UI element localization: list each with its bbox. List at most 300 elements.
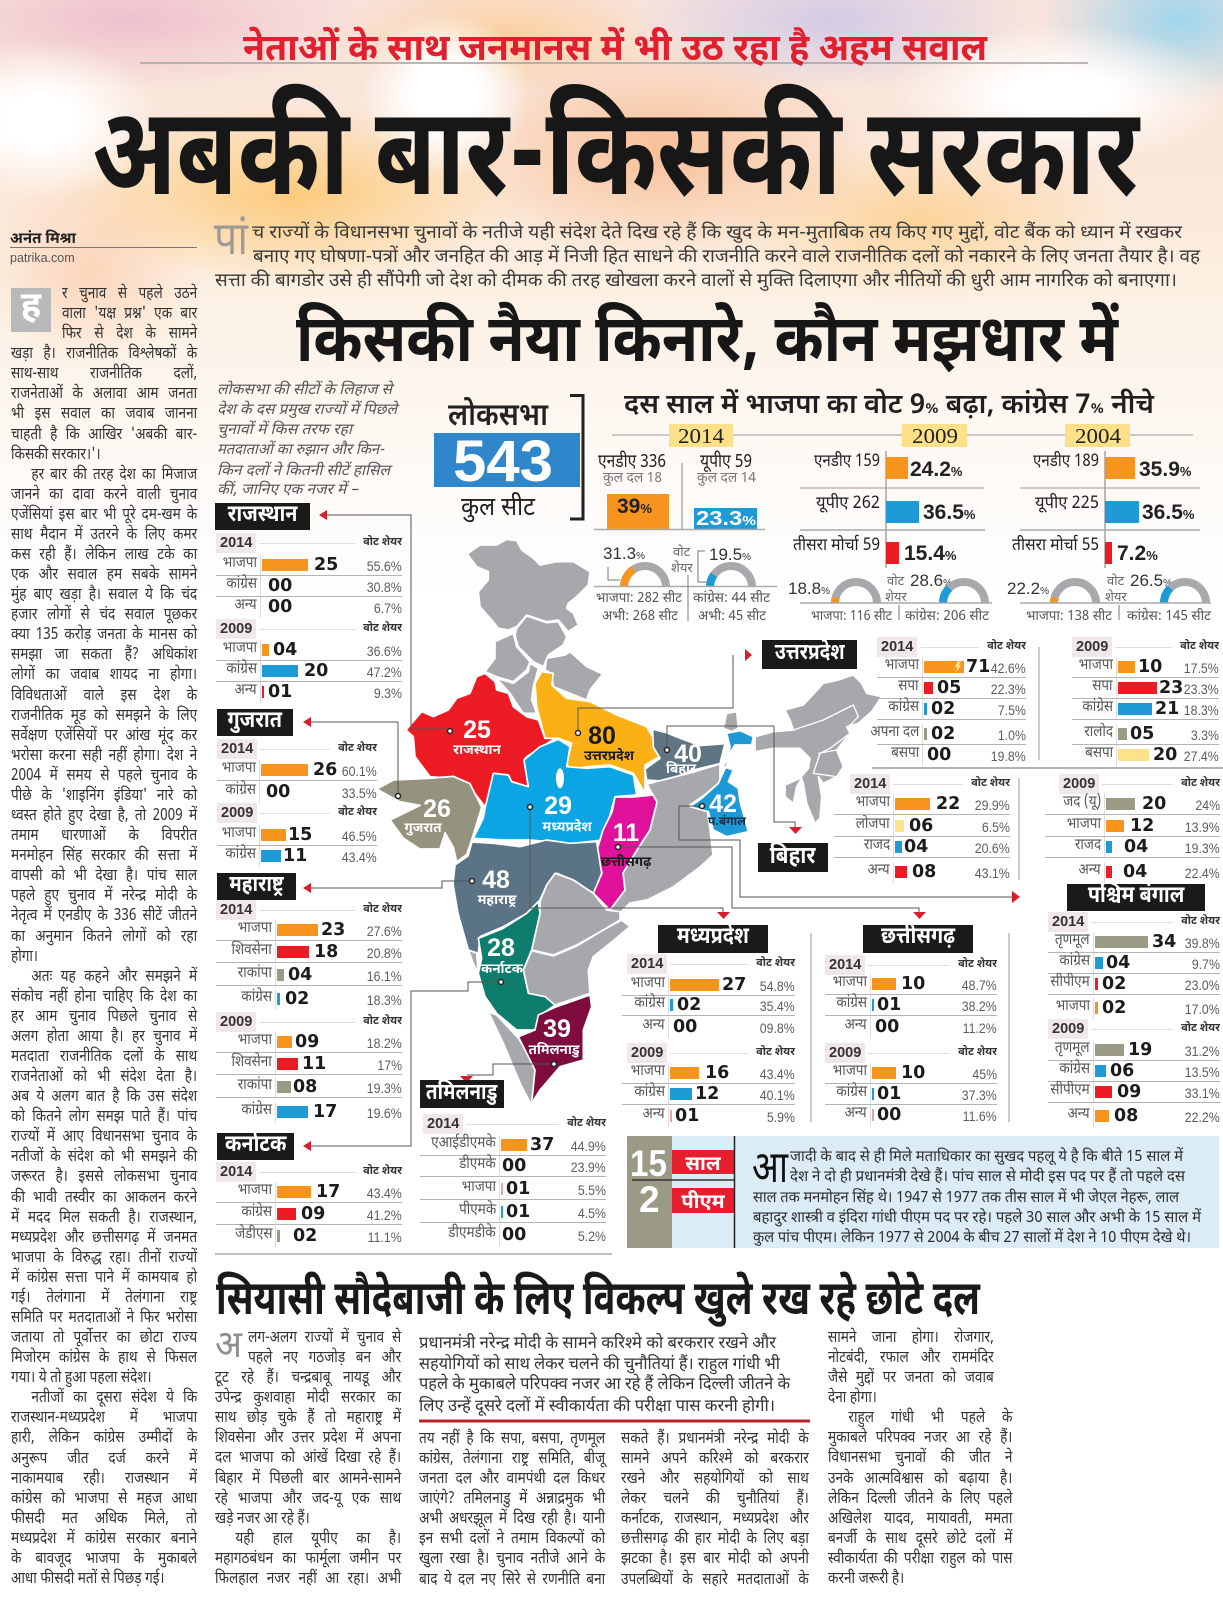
state table: Maharashtra: राकांपा [238, 964, 272, 984]
map: Uttar Pradesh [535, 672, 659, 793]
map: Andhra Pradesh [523, 920, 630, 1005]
map seat labels: उत्तरप्रदेश [584, 746, 635, 766]
state table: Bihar 2009: 04 [1123, 862, 1147, 882]
state table: Gujarat: 43.4% [342, 848, 377, 864]
state table: Uttar Pradesh 2009: 23 [1159, 678, 1183, 698]
state table: Bihar 2009 [1045, 774, 1220, 883]
byline [10, 230, 197, 265]
state table: Madhya Pradesh: 27 [722, 974, 746, 994]
state table: Karnataka: 11.1% [368, 1228, 402, 1244]
left column article: मनमोहन सिंह सरकार की सत्ता में [11, 846, 197, 867]
map seat labels: 26 [423, 795, 451, 823]
state table: Chhattisgarh: वोट शेयर [958, 1046, 997, 1060]
bottom article column 3: छत्तीसगढ़ की हार मोदी के लिए बड़ा [621, 1529, 809, 1550]
left column article: पीछे के 'शाइनिंग इंडिया' नारे को [11, 786, 197, 807]
state table: West Bengal: कांग्रेस [1059, 1060, 1090, 1080]
2009 alliance bars: तीसरा मोर्चा 59 [793, 534, 880, 557]
state table: Rajasthan: 55.6% [367, 558, 402, 574]
2009 seat gauges: भाजपा: 116 सीट [811, 607, 892, 626]
bottom article column 4: विधानसभा चुनावों की जीत ने [828, 1448, 1012, 1469]
kicker headline: नेताओं के साथ जनमानस में भी उठ रहा है अहम सवाल [243, 26, 988, 76]
state table: Maharashtra: 11 [302, 1054, 326, 1074]
state table: Bihar 2014: 20.6% [975, 840, 1010, 856]
left column article: संकोच नहीं होना चाहिए कि देश का [11, 987, 197, 1008]
bottom article column 2: अभी अधरझूल में दिख रही है। यानी [419, 1509, 605, 1530]
state table: Gujarat: 46.5% [342, 828, 377, 844]
state table: Chhattisgarh: 00 [877, 1104, 901, 1124]
state table: West Bengal: 08 [1114, 1106, 1138, 1126]
state table: Rajasthan: 2014 [220, 535, 252, 551]
drop cap box H [11, 288, 51, 332]
state table: Bihar 2009: 19.3% [1185, 840, 1220, 856]
15 years 2 PMs callout: साल तक मनमोहन सिंह थे। 1947 से 1977 तक तीस साल में भी जेएल नेहरू, लाल [753, 1187, 1179, 1209]
left column article: आधा फीसदी मतों से पिछड़ गई। [11, 1569, 165, 1590]
state table: Maharashtra: 2009 [220, 1014, 252, 1030]
map seat labels: 11 [613, 819, 639, 847]
state table: Chhattisgarh: वोट शेयर [958, 958, 997, 972]
state table: Tamil Nadu: 37 [530, 1134, 554, 1154]
state table: Bihar 2014: अन्य [868, 862, 890, 880]
bottom article column 2: इन सभी दलों ने तमाम विकल्पों को [419, 1529, 605, 1550]
state table: Gujarat: 11 [283, 846, 307, 866]
state heading: Gujarat [217, 709, 293, 736]
state table: West Bengal [1048, 912, 1220, 1127]
state table: Tamil Nadu [420, 1114, 606, 1246]
state table: Gujarat: कांग्रेस [225, 782, 256, 800]
bottom article column 3 [621, 1428, 810, 1591]
2014 seat gauges: शेयर [671, 560, 693, 578]
map: Jharkhand and Odisha [610, 764, 720, 913]
state heading: Uttar Pradesh [762, 640, 857, 669]
state table: Gujarat: वोट शेयर [338, 806, 377, 820]
left column article: जानने का दावा करने वाली चुनाव [11, 485, 197, 506]
left column article: राजस्थान-मध्यप्रदेश में भाजपा [11, 1408, 197, 1429]
left column article: लोगों का जवाब शायद ना होगा। [11, 665, 197, 686]
state table: Bihar 2009: जद (यू) [1063, 794, 1101, 812]
vote share heading: दस साल में भाजपा का वोट 9 % बढ़ा, कांग्रेस 7% नीचे [624, 388, 1155, 425]
state heading: Rajasthan: राजस्थान [228, 501, 297, 531]
bottom article column 4: उनके आत्मविश्वास को बढ़ाया है। [828, 1469, 1012, 1490]
state table: Gujarat [217, 739, 378, 867]
map: Haryana [497, 663, 538, 713]
state table: Maharashtra: 09 [295, 1032, 319, 1052]
left column article: भरोसा करना सही नहीं होगा। देश ने [11, 746, 197, 767]
state table: West Bengal: 31.2% [1185, 1042, 1220, 1058]
left column article: भी इस सवाल का जवाब जानना [11, 404, 197, 425]
state table: Rajasthan [216, 533, 402, 703]
left column article: मतदाता राजनीतिक दलों के साथ [11, 1047, 197, 1068]
state table: Tamil Nadu: 00 [502, 1156, 526, 1176]
map connectors and arrows [303, 510, 1020, 1151]
state table: Maharashtra: 16.1% [367, 968, 402, 984]
state table: Uttar Pradesh 2009: 23.3% [1184, 680, 1219, 696]
map seat labels: 25 [463, 716, 491, 744]
left column article: अतः यह कहने और समझने में [31, 967, 197, 988]
bottom article column 3: सामने अपने करिश्मे को बरकरार [621, 1449, 809, 1470]
2004 seat gauges: वोट [1107, 573, 1125, 591]
state table: Maharashtra: 17% [377, 1056, 402, 1072]
state table: Madhya Pradesh: 02 [677, 994, 701, 1014]
state table: Karnataka: वोट शेयर [363, 1165, 402, 1179]
15 years 2 PMs callout: साल [685, 1153, 722, 1179]
state table: Tamil Nadu: 2014 [427, 1116, 459, 1132]
state table: Madhya Pradesh: भाजपा [631, 1062, 665, 1082]
left column article: गई। तेलंगाना में तेलंगाना राष्ट्र [11, 1288, 197, 1309]
left column article: का अनुमान कितने लोगों को रहा [11, 926, 197, 948]
state table: Karnataka: 2014 [220, 1164, 252, 1180]
state table: Tamil Nadu: 44.9% [571, 1138, 606, 1154]
state table: Karnataka: 17 [316, 1182, 340, 1202]
left column article: समझा जा सकता हैं? अधिकांश [11, 645, 197, 666]
2009 seat gauges [788, 571, 992, 626]
left column article: में मदद मिल सकती है। राजस्थान, [11, 1208, 197, 1229]
2009 alliance bars: यूपीए 262 [816, 492, 880, 515]
map: Tamil Nadu [518, 995, 592, 1103]
2004 seat gauges: 26.5% [1130, 571, 1172, 590]
left column article: फिर से देश के सामने [62, 324, 197, 345]
state table: Chhattisgarh: 38.2% [962, 998, 997, 1014]
2014 alliance bars: यूपीए 59 [700, 451, 752, 475]
state table: Uttar Pradesh 2014: 00 [927, 744, 951, 764]
state table: Tamil Nadu: 01 [506, 1202, 530, 1222]
15 years 2 PMs callout: जादी के बाद से ही मिले मताधिकार का सुखद पहलू ये है कि बीते 15 साल में [790, 1146, 1184, 1168]
state table: Bihar 2014: 29.9% [975, 796, 1010, 812]
state table: Rajasthan: 20 [304, 660, 328, 680]
state table: Uttar Pradesh 2014: 02 [931, 724, 955, 744]
state heading: Uttar Pradesh: उत्तरप्रदेश [775, 639, 844, 668]
state heading: Madhya Pradesh [658, 925, 768, 953]
state table: Uttar Pradesh 2014: 71 [966, 656, 990, 676]
left column article: अलग होता आया है। हर चुनाव में [11, 1027, 197, 1048]
bottom article column 2 [419, 1428, 607, 1591]
2014 seat gauges: भाजपा: 282 सीट [596, 589, 682, 608]
state table: Gujarat: 26 [313, 760, 337, 780]
state table: Karnataka: 09 [301, 1204, 325, 1224]
bottom article column 2: खुला रखा है। चुनाव नतीजे आने के [419, 1549, 605, 1570]
map: Telangana [532, 873, 620, 955]
bottom headline: सियासी सौदेबाजी के लिए विकल्प खुले रख रहे छोटे दल [216, 1271, 981, 1334]
left column article: हारी, लेकिन कांग्रेस उम्मीदों के [11, 1428, 197, 1449]
state table: Madhya Pradesh: 2009 [631, 1045, 663, 1061]
2009 alliance bars: 15.4% [904, 542, 957, 565]
map seat labels: 48 [482, 866, 510, 894]
left column article: राजनेताओं को भी संदेश देता है। [11, 1067, 197, 1088]
left column article: मध्यप्रदेश में कांग्रेस सरकार बनाने [11, 1529, 197, 1550]
state table: Chhattisgarh: 00 [875, 1016, 899, 1036]
state table: Rajasthan: भाजपा [223, 554, 257, 574]
left column article: गया। ये तो हुआ पहला संदेश। [11, 1368, 152, 1389]
state table: Madhya Pradesh: 09.8% [760, 1020, 795, 1036]
map seat labels: मध्यप्रदेश [542, 817, 592, 837]
state table: Bihar 2009: अन्य [1079, 862, 1101, 880]
state heading: Maharashtra: महाराष्ट्र [229, 871, 284, 900]
state table: Rajasthan: अन्य [235, 682, 257, 700]
state table: Bihar 2014: 2014 [854, 776, 886, 792]
bottom article column 1: यही हाल यूपीए का है। [235, 1529, 401, 1550]
left column article: राज्यों में आए विधानसभा चुनाव के [11, 1127, 197, 1148]
state table: Tamil Nadu: 5.5% [578, 1182, 606, 1198]
state table: Madhya Pradesh: भाजपा [631, 974, 665, 994]
left column article: मध्यप्रदेश और छत्तीसगढ़ में जनमत [11, 1228, 197, 1249]
15 years 2 PMs callout: कुल पांच पीएम। लेकिन 1977 से 2004 के बीच 27 सालों में देश ने 10 पीएम देखे थे। [753, 1227, 1191, 1249]
dividers between state tables [215, 647, 1223, 1254]
state table: Uttar Pradesh 2009: बसपा [1085, 744, 1113, 764]
state table: Uttar Pradesh 2009: 18.3% [1184, 702, 1219, 718]
left column article: ध्वस्त होते हुए देखा है, तो 2009 में [11, 806, 197, 827]
bottom article column 1: बिहार में पिछली बार आमने-सामने [215, 1469, 401, 1490]
bottom article column 1: टूट रहे हैं। चन्द्रबाबू नायडू और [215, 1368, 401, 1389]
bottom article column 3: रखने और सहयोगियों को साथ [621, 1469, 809, 1490]
state table: Rajasthan: 47.2% [367, 664, 402, 680]
bottom article column 4: अखिलेश यादव, मायावती, ममता [828, 1509, 1012, 1530]
left column article: नतीजों के संदेश को भी समझने की [11, 1147, 197, 1168]
state table: Uttar Pradesh 2009: वोट शेयर [1180, 640, 1219, 654]
state table: Karnataka: भाजपा [238, 1182, 272, 1200]
state table: Bihar 2009: 24% [1195, 796, 1220, 812]
state table: Gujarat: वोट शेयर [338, 742, 377, 756]
state table: Chhattisgarh: 11.2% [963, 1020, 997, 1036]
state table: Maharashtra: 18.3% [367, 992, 402, 1008]
bottom article column 2: बाद ये दल नए सिरे से रणनीति बना [419, 1570, 605, 1591]
state heading: Bihar: बिहार [770, 841, 816, 873]
state table: Uttar Pradesh 2014: भाजपा [885, 656, 919, 676]
state table: Rajasthan: 25 [314, 554, 338, 574]
byline: patrika.com [10, 251, 75, 265]
state table: Bihar 2014: 06 [909, 816, 933, 836]
2004 seat gauges [1007, 571, 1211, 626]
state table: Chhattisgarh: 37.3% [962, 1086, 997, 1102]
bottom article column 4 [828, 1328, 1013, 1590]
state table: Bihar 2009: वोट शेयर [1181, 777, 1220, 791]
section headline: किसकी नैया किनारे, कौन मझधार में [296, 301, 1119, 388]
state table: Uttar Pradesh 2014: 22.3% [991, 680, 1026, 696]
left column article: राजनीतिक मूड को समझने के लिए [11, 706, 197, 727]
state table: Tamil Nadu: एआईडीएमके [431, 1134, 496, 1154]
15 years 2 PMs callout: देश ने दो ही प्रधानमंत्री देखे हैं। पांच साल से मोदी इस पद पर हैं तो पहले दस [790, 1166, 1186, 1188]
state table: Chhattisgarh: 48.7% [962, 976, 997, 992]
state table: Madhya Pradesh: 43.4% [760, 1066, 795, 1082]
state table: Chhattisgarh: 01 [877, 994, 901, 1014]
map seat labels: प.बंगाल [708, 814, 747, 830]
state table: Bihar 2014: 6.5% [982, 818, 1010, 834]
state table: Rajasthan: 00 [268, 596, 292, 616]
state table: Tamil Nadu: भाजपा [462, 1178, 496, 1198]
state table: West Bengal: कांग्रेस [1059, 952, 1090, 972]
state table: Chhattisgarh: कांग्रेस [836, 1084, 867, 1102]
2009 alliance bars: एनडीए 159 [814, 450, 880, 473]
bottom article column 1: लग-अलग राज्यों में चुनाव से [248, 1328, 401, 1349]
2004 alliance bars: 36.5% [1142, 501, 1195, 524]
map seat labels: 80 [588, 722, 616, 750]
map seat labels: बिहार [666, 760, 697, 779]
year axis: 2014 [678, 424, 725, 448]
lede paragraph: बनाए गए घोषणा-पत्रों और जनहित की आड़ में निजी हित साधने की राजनीति करने वाले राजनीतिक दलों को नकारने के लिए जनता तैयार है। वह [253, 244, 1201, 270]
state table: Uttar Pradesh 2009: सपा [1093, 678, 1113, 696]
bottom article column 1: फिलहाल नजर नहीं आ रहा। अभी [215, 1569, 401, 1590]
2014 alliance bars: एनडीए 336 [598, 451, 666, 475]
lede paragraph: च राज्यों के विधानसभा चुनावों के नतीजे यही संदेश देते दिख रहे हैं कि खुद के मन-मुताबिक तय किए गए मुद्दों, वोट बैंक को ध्यान में रखकर [252, 220, 1182, 246]
italic intro [217, 380, 400, 501]
state table: Maharashtra: शिवसेना [232, 942, 272, 960]
state table: Gujarat: कांग्रेस [225, 846, 256, 864]
15 years 2 PMs callout: आ [752, 1143, 789, 1200]
map seat labels: तमिलनाडु [528, 1041, 580, 1060]
map: Punjab [485, 633, 530, 682]
left column article: साथ मैदान में उतरने के लिए कमर [11, 525, 197, 546]
bottom article column 3: उपलब्धियों के सहारे मतदाताओं के [621, 1570, 809, 1591]
state table: Karnataka [216, 1162, 402, 1247]
state table: Maharashtra [216, 900, 402, 1123]
state heading: West Bengal [1067, 884, 1205, 911]
left column article: में कांग्रेस सत्ता पाने में कामयाब हो [11, 1268, 197, 1289]
state table: Maharashtra: 18.2% [367, 1034, 402, 1050]
pull quote [419, 1333, 810, 1421]
2004 alliance bars: यूपीए 225 [1035, 492, 1099, 515]
state table: Madhya Pradesh: 01 [675, 1106, 699, 1126]
state table: Gujarat: भाजपा [222, 824, 256, 844]
state table: Uttar Pradesh 2009: 2009 [1076, 639, 1108, 655]
state table: Rajasthan: 9.3% [374, 684, 402, 700]
map: Kerala [488, 1012, 535, 1105]
left column article: 2004 में समय से पहले चुनाव के [11, 766, 197, 787]
map: Jammu and Kashmir [467, 539, 590, 632]
left column article: भाजपा के विरुद्ध रहा। तीनों राज्यों [11, 1248, 197, 1269]
state heading: Gujarat: गुजरात [228, 707, 282, 737]
2004 seat gauges: भाजपा: 138 सीट [1026, 607, 1112, 626]
state table: Uttar Pradesh 2014: कांग्रेस [888, 698, 919, 718]
state heading: Chhattisgarh [863, 925, 973, 953]
state table: Tamil Nadu: 5.2% [578, 1228, 606, 1244]
bottom article column 4: स्वीकार्यता की परीक्षा राहुल को पास [828, 1549, 1012, 1570]
state table: West Bengal: 06 [1110, 1060, 1134, 1080]
left column article [11, 284, 198, 1590]
state table: Maharashtra: भाजपा [238, 920, 272, 938]
15 years 2 PMs callout: 2 [639, 1179, 660, 1220]
state table: Bihar 2014: राजद [864, 836, 890, 856]
state table: Tamil Nadu: 01 [506, 1178, 530, 1198]
2004 seat gauges: शेयर [1105, 589, 1127, 607]
state table: Rajasthan: वोट शेयर [363, 622, 402, 636]
state table: Maharashtra: कांग्रेस [241, 988, 272, 1008]
state table: Chhattisgarh: 11.6% [963, 1108, 997, 1124]
state heading: Chhattisgarh: छत्तीसगढ़ [881, 923, 955, 953]
2004 alliance bars [1012, 450, 1200, 568]
left column article: कस रही हैं। लेकिन लाख टके का [11, 545, 197, 566]
state table: Chhattisgarh: भाजपा [833, 1062, 867, 1082]
state table: West Bengal: 04 [1106, 952, 1130, 972]
state table: Maharashtra: 17 [313, 1102, 337, 1122]
map seat labels: कर्नाटक [481, 960, 524, 979]
state table: Madhya Pradesh: 5.9% [767, 1108, 795, 1124]
state table: Karnataka: 41.2% [367, 1206, 402, 1222]
italic intro: मतदाताओं का रुझान और किन- [217, 440, 385, 461]
2014 seat gauges: वोट [673, 544, 691, 562]
bottom article column 4: बनर्जी के साथ दूसरे छोटे दलों में [828, 1529, 1012, 1550]
bottom article column 4: मुकाबले परिपक्व नजर आ रहे हैं। [828, 1428, 1012, 1449]
state heading: West Bengal: पश्चिम बंगाल [1088, 882, 1184, 912]
bottom article column 2: कांग्रेस, तेलंगाना राष्ट्र समिति, बीजू [419, 1449, 605, 1470]
state table: Madhya Pradesh: 00 [673, 1016, 697, 1036]
state table: Maharashtra: राकांपा [238, 1076, 272, 1096]
state table: Chhattisgarh [825, 955, 998, 1126]
left column article: को कितने लोग समझ पाते हैं। पांच [11, 1107, 197, 1128]
state table: Rajasthan: भाजपा [223, 640, 257, 658]
state table: Chhattisgarh: 2009 [829, 1045, 861, 1061]
2009 seat gauges: कांग्रेस: 206 सीट [905, 606, 989, 626]
state table: Maharashtra: 08 [293, 1076, 317, 1096]
bottom article column 1: महागठबंधन का फार्मूला जमीन पर [215, 1549, 401, 1570]
state table: Uttar Pradesh 2014: 02 [931, 698, 955, 718]
state table: Uttar Pradesh 2014: 1.0% [998, 726, 1026, 742]
state table: Uttar Pradesh 2014: बसपा [891, 744, 919, 764]
bottom article column 1: साथ छोड़ चुके हैं तो महाराष्ट्र में [215, 1408, 401, 1429]
bottom article column 4: लेकिन दिल्ली जीतने के लिए पहले [828, 1489, 1012, 1510]
italic intro: चुनावों में किस तरफ रहा [217, 420, 355, 441]
state table: West Bengal: सीपीएम [1051, 974, 1090, 992]
drop cap box H: ह [21, 285, 41, 332]
state table: Karnataka: जेडीएस [235, 1226, 272, 1244]
state table: Rajasthan: कांग्रेस [226, 576, 257, 594]
15 years 2 PMs callout [627, 1136, 1219, 1249]
state heading: Tamil Nadu: तमिलनाडु [426, 1079, 498, 1108]
year axis [612, 424, 1193, 448]
state table: Bihar 2009: राजद [1075, 836, 1101, 856]
bottom article column 1: दल भाजपा को आंखें दिखा रहे हैं। [215, 1448, 401, 1469]
state table: Tamil Nadu: 00 [502, 1224, 526, 1244]
state table: Gujarat: 33.5% [342, 784, 377, 800]
map seat labels: छत्तीसगढ़ [601, 853, 652, 872]
pull quote: पहले के मुकाबले परिपक्व नजर आ रहे हैं लेकिन दिल्ली जीतने के [419, 1374, 790, 1396]
state table: Madhya Pradesh: अन्य [643, 1106, 665, 1124]
left column article: साथ-साथ राजनीतिक दलों, [11, 364, 197, 385]
state table: Madhya Pradesh: कांग्रेस [634, 994, 665, 1014]
state table: Tamil Nadu: डीएमडीके [449, 1224, 496, 1244]
state table: Uttar Pradesh 2009: भाजपा [1079, 656, 1113, 676]
map: Karnataka [478, 902, 555, 1030]
state table: West Bengal: भाजपा [1056, 998, 1090, 1016]
state table: West Bengal: 9.7% [1192, 956, 1220, 972]
map: Himachal Pradesh [515, 616, 567, 667]
map: Gujarat [377, 776, 482, 862]
state table: Maharashtra: 18 [314, 942, 338, 962]
state table: Rajasthan: 04 [273, 640, 297, 660]
state table: Madhya Pradesh [622, 954, 796, 1127]
map: Goa coast [468, 950, 478, 973]
map seat labels: राजस्थान [453, 742, 502, 760]
map seat labels: 39 [543, 1015, 571, 1043]
left column article: र चुनाव से पहले उठने [62, 284, 197, 305]
state table: Uttar Pradesh 2009: 27.4% [1184, 748, 1219, 764]
map: Bihar [645, 729, 725, 782]
state heading: Madhya Pradesh: मध्यप्रदेश [677, 923, 749, 953]
state table: Bihar 2009: 12 [1130, 816, 1154, 836]
2014 seat gauges: 31.3% [603, 544, 645, 563]
state table: West Bengal: तृणमूल [1055, 1040, 1090, 1058]
2004 alliance bars: एनडीए 189 [1033, 450, 1099, 473]
left column article: हर आम चुनाव पिछले चुनाव से [11, 1007, 197, 1028]
map: Chhattisgarh [593, 795, 657, 910]
2004 alliance bars: तीसरा मोर्चा 55 [1012, 534, 1099, 557]
map seat labels: 42 [709, 790, 737, 818]
left column article: के बावजूद भाजपा के मुकाबले [11, 1549, 197, 1570]
left column article: अनुरूप जीत दर्ज करने में [11, 1449, 197, 1470]
left column article: कांग्रेस को भाजपा से महज आधा [11, 1489, 197, 1510]
state table: West Bengal: वोट शेयर [1181, 1022, 1220, 1036]
state table: West Bengal: सीपीएम [1051, 1082, 1090, 1100]
state table: Bihar 2014: 08 [912, 862, 936, 882]
2009 seat gauges: 28.6% [910, 571, 952, 590]
total seats block: कुल सीट [461, 492, 536, 526]
